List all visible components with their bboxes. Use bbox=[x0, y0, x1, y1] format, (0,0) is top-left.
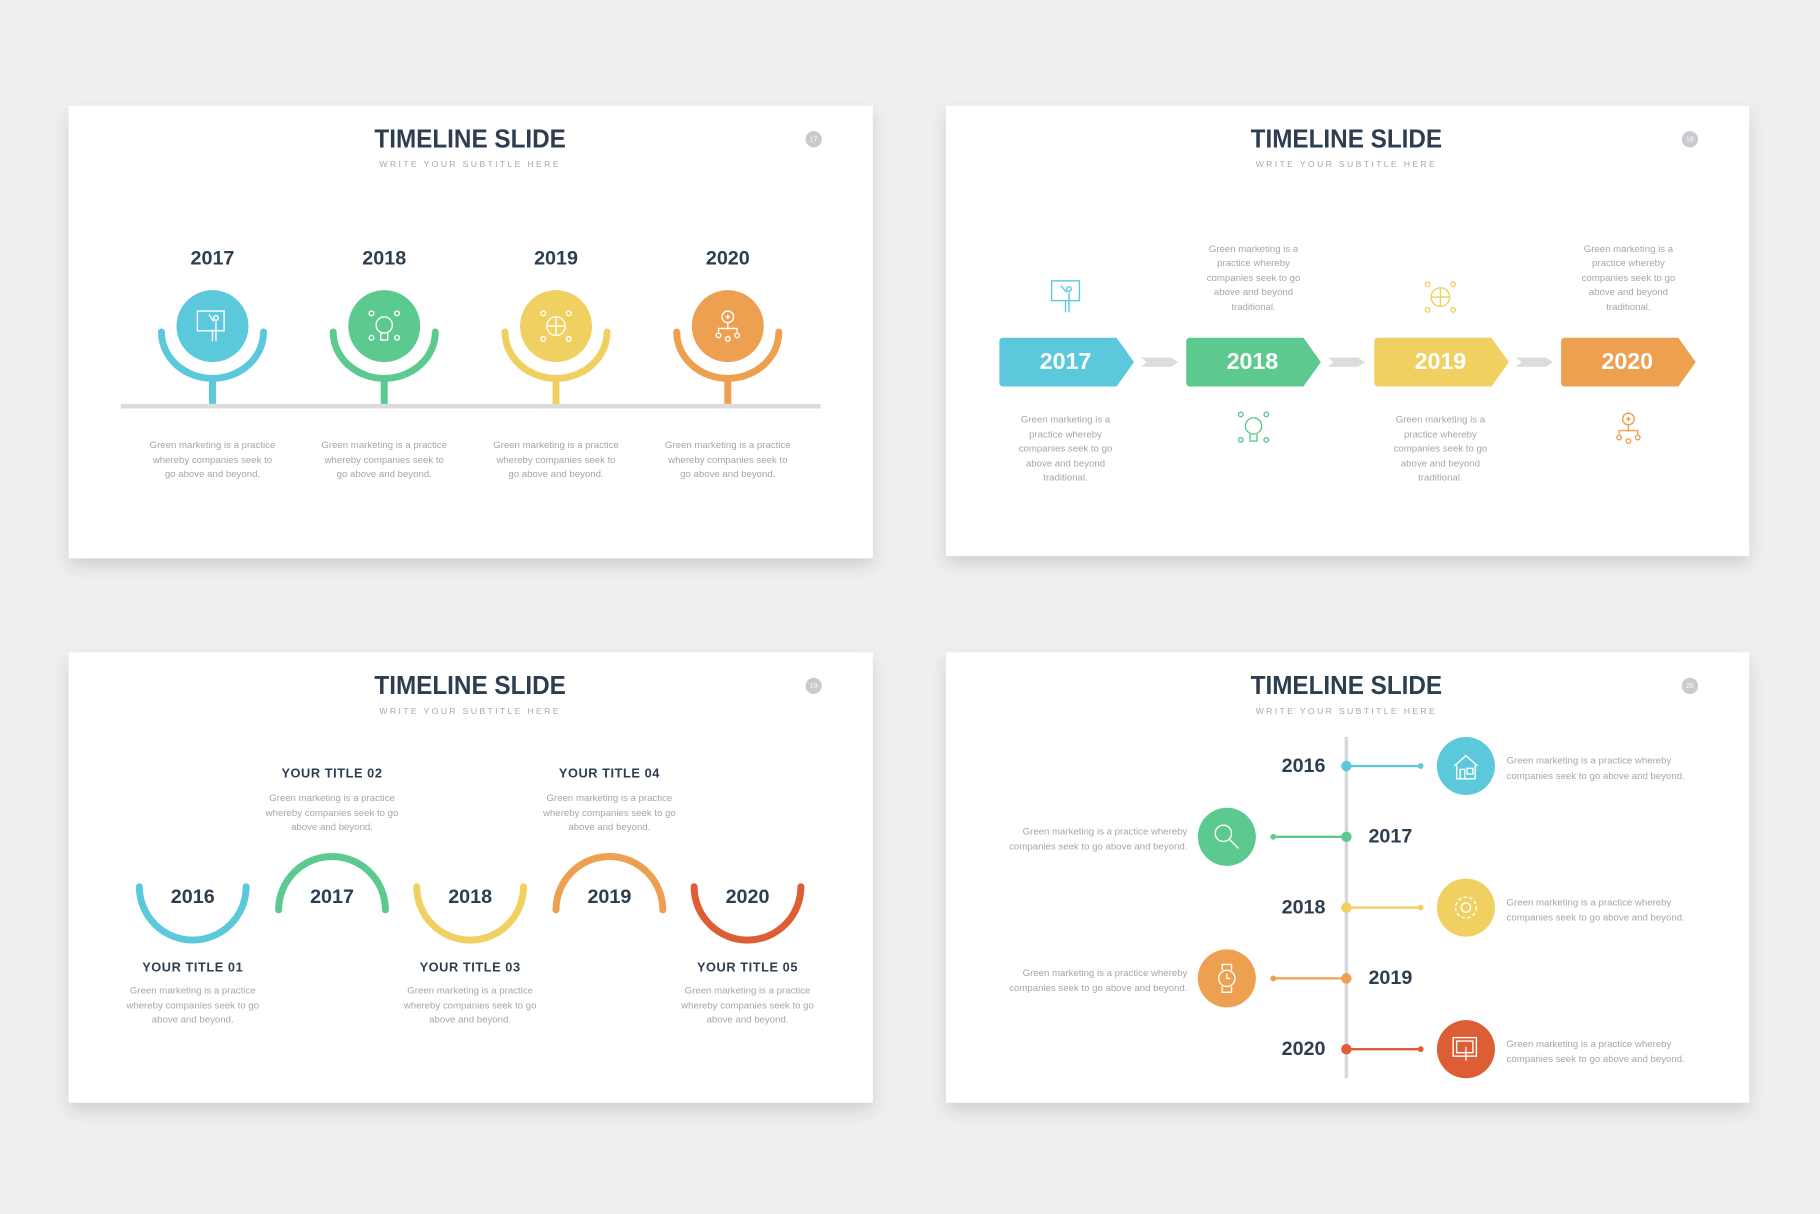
row 2017: Green marketing is a practice whereby bbox=[1023, 826, 1188, 837]
step 2017: above and beyond bbox=[1026, 459, 1105, 470]
item 2019 bbox=[493, 248, 619, 480]
step 2020: practice whereby bbox=[1592, 258, 1665, 269]
row 2018: 2018 bbox=[1282, 896, 1326, 918]
item 2017: go above and beyond. bbox=[165, 469, 260, 480]
step 2020: traditional. bbox=[1606, 302, 1651, 313]
row 2018: companies seek to go above and beyond. bbox=[1507, 912, 1685, 923]
page number: 18 bbox=[1686, 137, 1694, 144]
step 2019: traditional. bbox=[1418, 472, 1463, 483]
arc 2016: YOUR TITLE 01 bbox=[142, 959, 243, 974]
step 2020: Green marketing is a bbox=[1584, 244, 1674, 255]
item 2018: whereby companies seek to bbox=[324, 455, 444, 466]
item 2017: whereby companies seek to bbox=[152, 455, 272, 466]
step 2020: 2020 bbox=[1601, 348, 1653, 374]
subtitle: WRITE YOUR SUBTITLE HERE bbox=[379, 706, 561, 716]
row 2016: Green marketing is a practice whereby bbox=[1507, 756, 1672, 767]
page number bbox=[806, 131, 822, 147]
page number bbox=[806, 678, 822, 694]
title: TIMELINE SLIDE bbox=[1251, 125, 1442, 153]
step 2020: above and beyond bbox=[1589, 287, 1668, 298]
row 2017 bbox=[1009, 808, 1412, 866]
panel: slide 20 vertical timeline bbox=[946, 652, 1749, 1103]
subtitle: WRITE YOUR SUBTITLE HERE bbox=[379, 159, 561, 169]
step 2020: companies seek to go bbox=[1582, 273, 1675, 284]
item 2018: 2018 bbox=[362, 248, 406, 270]
item 2020 bbox=[665, 248, 791, 480]
step 2019: Green marketing is a bbox=[1396, 414, 1486, 425]
page number: 19 bbox=[810, 683, 818, 690]
arc 2016: 2016 bbox=[171, 886, 215, 908]
arc 2019: whereby companies seek to go bbox=[542, 808, 676, 819]
item 2019: 2019 bbox=[534, 248, 578, 270]
step 2018: Green marketing is a bbox=[1209, 244, 1299, 255]
step 2018: above and beyond bbox=[1214, 287, 1293, 298]
item 2018 bbox=[321, 248, 447, 480]
arc 2017: Green marketing is a practice bbox=[269, 793, 395, 804]
arc 2020: Green marketing is a practice bbox=[685, 985, 810, 996]
arc 2017: 2017 bbox=[310, 886, 354, 908]
item 2020: 2020 bbox=[706, 248, 750, 270]
subtitle: WRITE YOUR SUBTITLE HERE bbox=[1256, 706, 1437, 716]
row 2019: 2019 bbox=[1368, 967, 1412, 989]
panel: slide 18 arrow timeline bbox=[946, 106, 1749, 556]
item 2018: Green marketing is a practice bbox=[321, 440, 447, 451]
arc 2017: whereby companies seek to go bbox=[265, 808, 398, 819]
arc 2019: YOUR TITLE 04 bbox=[559, 766, 660, 781]
step 2018: companies seek to go bbox=[1207, 273, 1300, 284]
arc 2017: YOUR TITLE 02 bbox=[281, 766, 383, 781]
page number: 17 bbox=[810, 137, 818, 144]
item 2019: go above and beyond. bbox=[508, 469, 604, 480]
arc 2019 bbox=[542, 766, 676, 910]
page number: 20 bbox=[1686, 683, 1694, 690]
row 2016: 2016 bbox=[1282, 755, 1326, 777]
row 2016: companies seek to go above and beyond. bbox=[1507, 771, 1685, 782]
arc 2016 bbox=[125, 886, 259, 1025]
arc 2018: above and beyond. bbox=[429, 1014, 511, 1025]
arc 2020 bbox=[680, 886, 814, 1025]
row 2019: Green marketing is a practice whereby bbox=[1023, 968, 1188, 979]
step 2019 bbox=[1374, 282, 1509, 483]
step 2018: practice whereby bbox=[1217, 258, 1290, 269]
item 2020: Green marketing is a practice bbox=[665, 440, 791, 451]
row 2017: 2017 bbox=[1368, 826, 1412, 848]
row 2016 bbox=[1282, 737, 1685, 795]
step 2019: above and beyond bbox=[1401, 459, 1480, 470]
item 2017 bbox=[150, 248, 275, 480]
arc 2018: whereby companies seek to go bbox=[403, 1001, 536, 1012]
step 2017: 2017 bbox=[1040, 348, 1091, 374]
step 2020 bbox=[1561, 244, 1696, 443]
item 2020: go above and beyond. bbox=[680, 469, 775, 480]
item 2017: 2017 bbox=[191, 248, 234, 270]
arc 2019: 2019 bbox=[587, 886, 631, 908]
arc 2017: above and beyond. bbox=[291, 822, 373, 833]
step 2018 bbox=[1186, 244, 1321, 442]
arc 2017 bbox=[265, 766, 398, 910]
row 2019: companies seek to go above and beyond. bbox=[1009, 983, 1187, 994]
item 2020: whereby companies seek to bbox=[667, 455, 787, 466]
step 2017 bbox=[999, 281, 1134, 483]
panel: slide 17 mic timeline bbox=[69, 106, 873, 558]
title: TIMELINE SLIDE bbox=[374, 672, 566, 700]
item 2019: Green marketing is a practice bbox=[493, 440, 619, 451]
item 2019: whereby companies seek to bbox=[495, 455, 616, 466]
step 2018: traditional. bbox=[1231, 302, 1276, 313]
row 2020 bbox=[1282, 1020, 1685, 1078]
arc 2020: whereby companies seek to go bbox=[680, 1001, 814, 1012]
row 2020: 2020 bbox=[1282, 1038, 1326, 1060]
arc 2018: 2018 bbox=[448, 886, 492, 908]
arc 2020: above and beyond. bbox=[707, 1014, 788, 1025]
page number bbox=[1682, 678, 1698, 694]
item 2018: go above and beyond. bbox=[337, 469, 432, 480]
step 2018: 2018 bbox=[1227, 348, 1278, 374]
title: TIMELINE SLIDE bbox=[1251, 672, 1442, 700]
step 2017: traditional. bbox=[1043, 472, 1088, 483]
step 2017: practice whereby bbox=[1029, 430, 1102, 441]
step 2019: practice whereby bbox=[1404, 430, 1477, 441]
page number bbox=[1682, 131, 1698, 147]
title: TIMELINE SLIDE bbox=[374, 125, 566, 153]
row 2018: Green marketing is a practice whereby bbox=[1507, 897, 1672, 908]
arc 2016: Green marketing is a practice bbox=[130, 985, 256, 996]
arc 2018 bbox=[403, 886, 536, 1025]
panel: slide 19 arc timeline bbox=[69, 652, 873, 1103]
step 2019: companies seek to go bbox=[1394, 443, 1487, 454]
step 2017: companies seek to go bbox=[1019, 443, 1112, 454]
arc 2018: Green marketing is a practice bbox=[407, 985, 533, 996]
connector arrows bbox=[1141, 357, 1553, 367]
arc 2020: YOUR TITLE 05 bbox=[697, 959, 798, 974]
arc 2019: Green marketing is a practice bbox=[547, 793, 672, 804]
row 2019 bbox=[1009, 949, 1412, 1007]
arc 2018: YOUR TITLE 03 bbox=[420, 959, 521, 974]
row 2017: companies seek to go above and beyond. bbox=[1009, 842, 1187, 853]
row 2020: Green marketing is a practice whereby bbox=[1507, 1039, 1672, 1050]
step 2019: 2019 bbox=[1415, 348, 1466, 374]
row 2018 bbox=[1282, 879, 1685, 937]
arc 2016: whereby companies seek to go bbox=[125, 1001, 259, 1012]
row 2020: companies seek to go above and beyond. bbox=[1507, 1054, 1685, 1065]
arc 2016: above and beyond. bbox=[152, 1014, 234, 1025]
subtitle: WRITE YOUR SUBTITLE HERE bbox=[1256, 159, 1437, 169]
arc 2020: 2020 bbox=[726, 886, 769, 908]
step 2017: Green marketing is a bbox=[1021, 414, 1111, 425]
arc 2019: above and beyond. bbox=[568, 822, 650, 833]
item 2017: Green marketing is a practice bbox=[150, 440, 275, 451]
